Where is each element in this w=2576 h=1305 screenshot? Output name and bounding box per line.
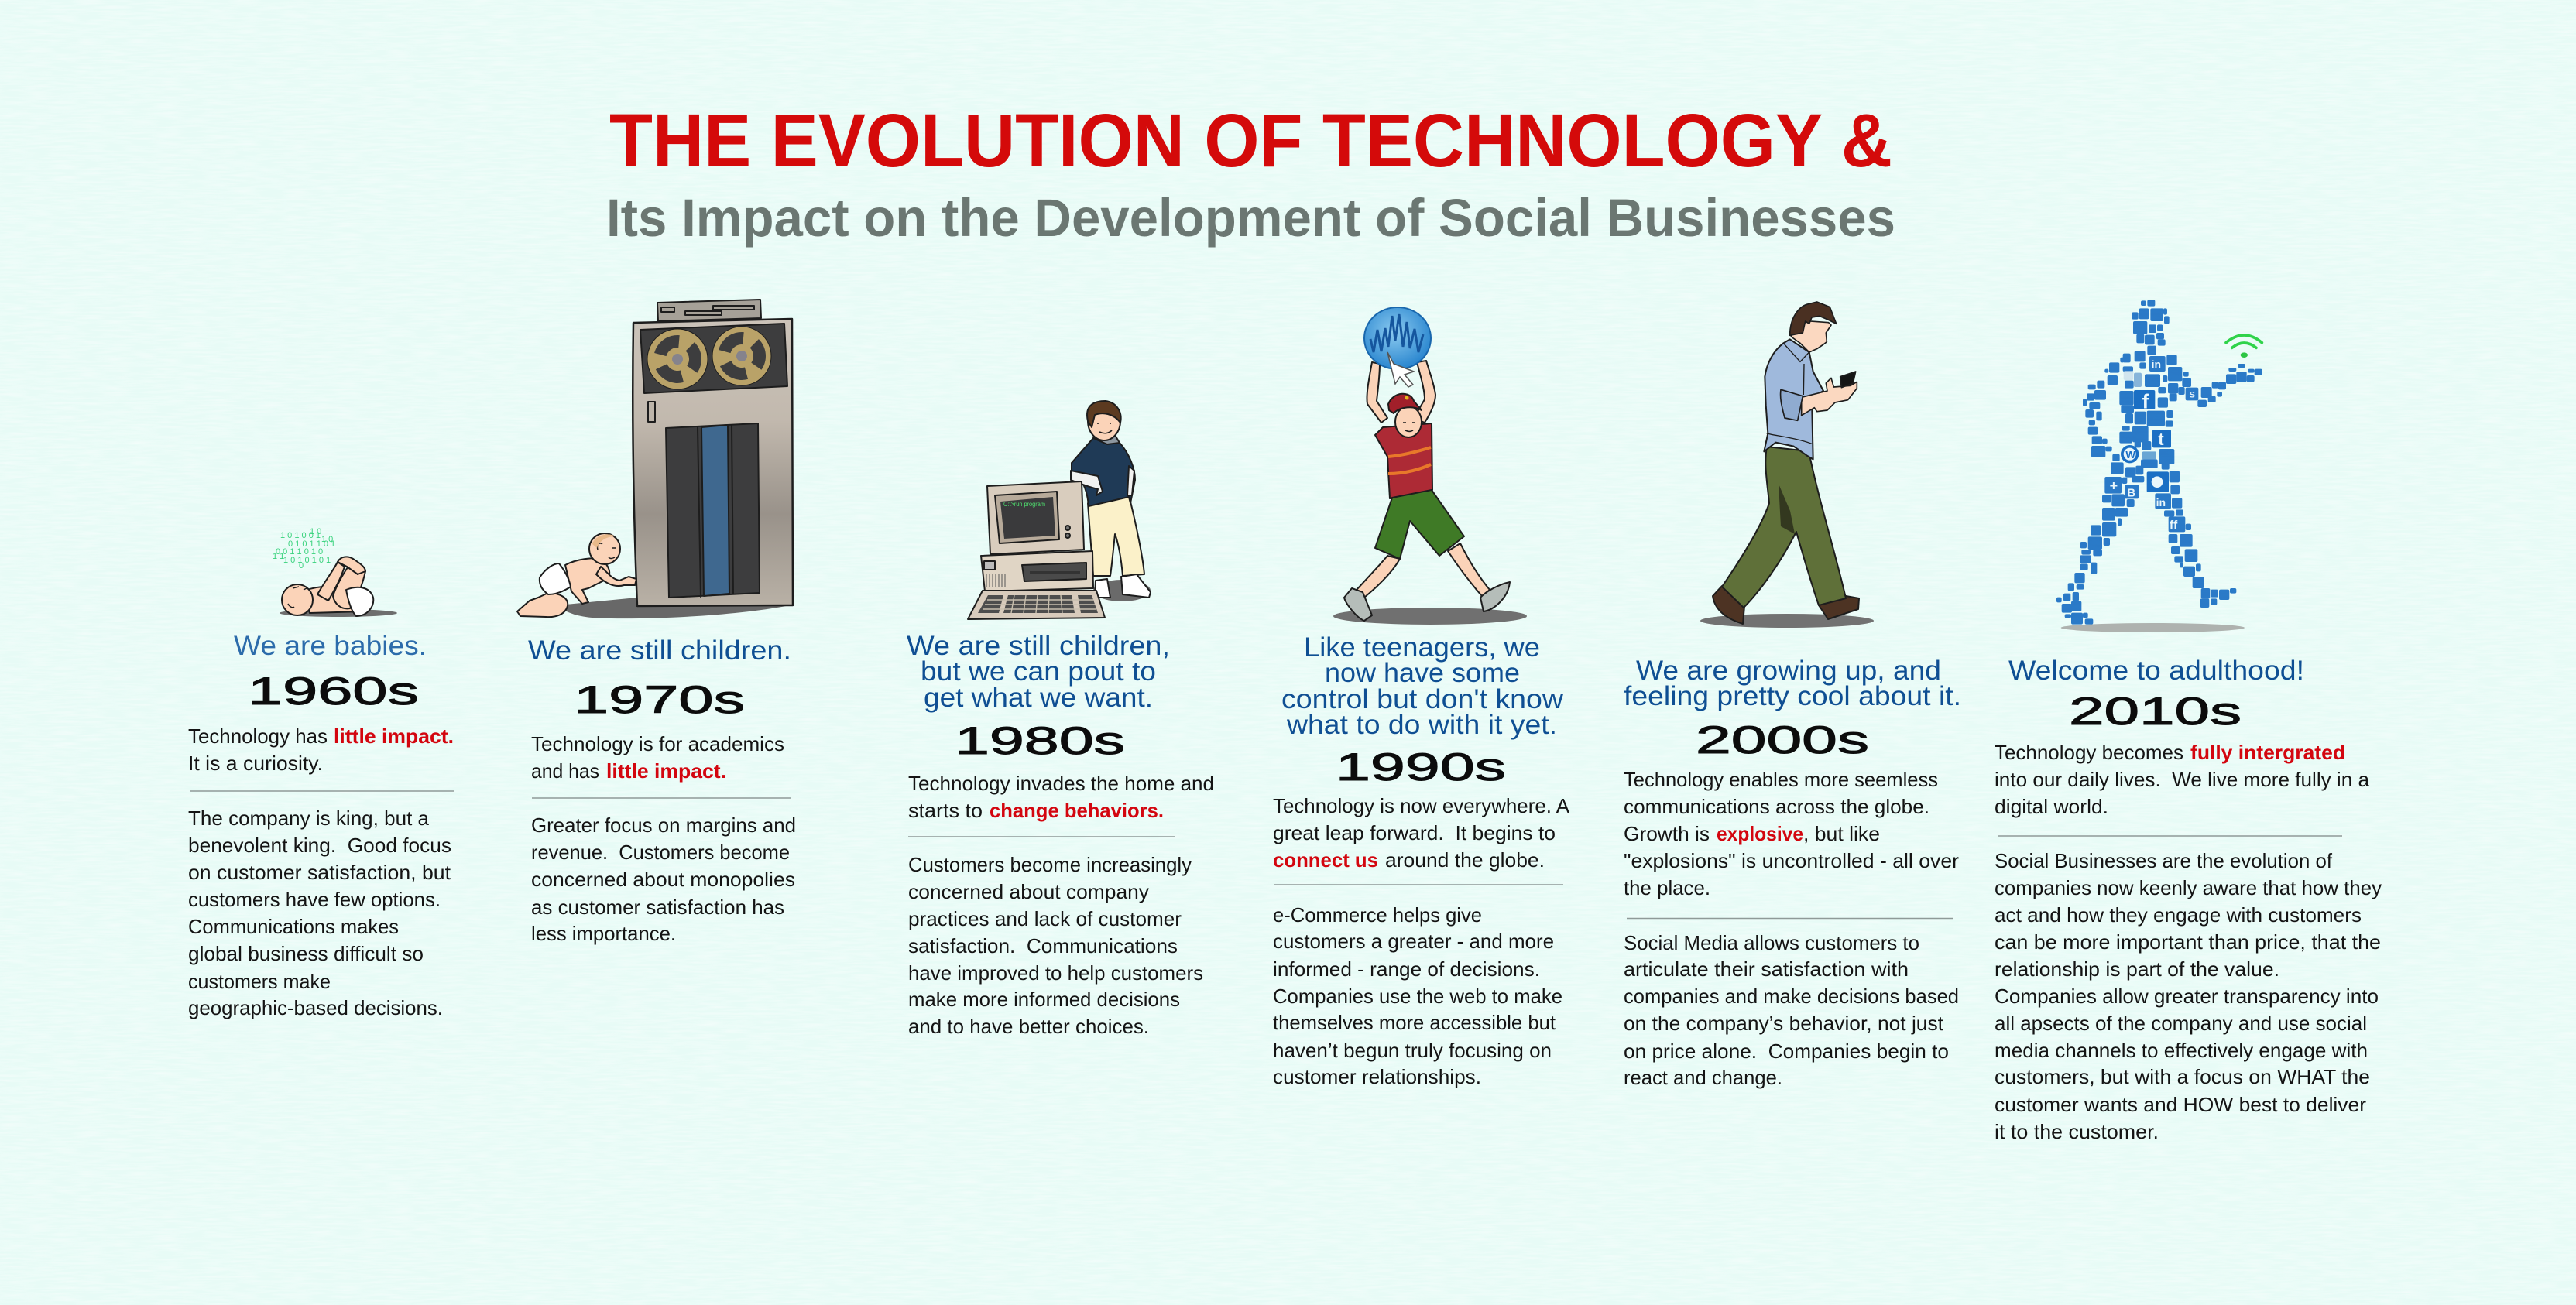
business text: and to have better choices.	[908, 1015, 1149, 1038]
business text	[1273, 903, 1562, 1088]
business text: concerned about company	[908, 880, 1149, 903]
icon: baby with binary digits: 1 0 1 0 1 0 1	[283, 556, 331, 565]
slogan	[1281, 632, 1564, 740]
impact text: "explosions" is uncontrolled - all over	[1624, 849, 1959, 872]
impact text: around the globe.	[1385, 848, 1545, 872]
impact text	[531, 732, 784, 783]
impact text: Technology becomes	[1995, 741, 2183, 764]
panel: 1990s	[1273, 307, 1570, 1088]
business text: satisfaction. Communications	[908, 934, 1178, 957]
business text: make more informed decisions	[908, 988, 1180, 1011]
icon: baby with binary digits: 1 0	[310, 527, 321, 536]
business text: it to the customer.	[1995, 1120, 2159, 1143]
slogan: but we can pout to	[921, 656, 1156, 687]
impact text: connect us	[1273, 848, 1378, 872]
business text	[531, 813, 796, 945]
impact text: little impact.	[334, 724, 454, 748]
business text: act and how they engage with customers	[1995, 903, 2362, 927]
business text: Companies allow greater transparency into	[1995, 985, 2379, 1008]
impact text	[1995, 741, 2370, 818]
business text: revenue. Customers become	[531, 841, 790, 864]
icon: baby with binary digits: 0 0 1 1 0 1 0	[276, 547, 323, 557]
slogan	[1624, 656, 1961, 711]
slogan: Like teenagers, we	[1304, 632, 1540, 663]
panel: 1960s	[188, 527, 454, 1019]
impact text	[1273, 794, 1570, 872]
business text: relationship is part of the value.	[1995, 957, 2279, 981]
business text: geographic-based decisions.	[188, 996, 443, 1019]
impact text: communications across the globe.	[1624, 795, 1929, 818]
impact text: Technology is now everywhere. A	[1273, 794, 1570, 817]
icon: baby with binary digits: 0 1 0 1 1 0 1	[288, 539, 335, 549]
impact text: Technology is for academics	[531, 732, 784, 755]
business text: customers make	[188, 970, 331, 993]
business text: media channels to effectively engage with	[1995, 1039, 2368, 1062]
business text: on the company’s behavior, not just	[1624, 1012, 1944, 1035]
business text	[1995, 849, 2382, 1143]
icon: figure made of social media icons: W	[2125, 449, 2135, 461]
business text: can be more important than price, that the	[1995, 930, 2381, 954]
business text: customers have few options.	[188, 888, 441, 911]
business text: articulate their satisfaction with	[1624, 957, 1909, 981]
business text	[1624, 931, 1959, 1089]
slogan: Welcome to adulthood!	[2008, 656, 2304, 686]
icon: child with personal computer	[968, 401, 1151, 619]
panel: 2010s	[1995, 300, 2382, 1143]
slogan	[907, 631, 1170, 713]
impact text: It is a curiosity.	[188, 752, 323, 775]
slogan: get what we want.	[924, 683, 1153, 713]
panel: 2000s	[1624, 302, 1961, 1089]
impact text: change behaviors.	[990, 799, 1164, 822]
impact text: and has	[531, 759, 599, 783]
impact text	[1624, 768, 1959, 899]
impact text: Growth is	[1624, 822, 1710, 845]
impact text	[188, 724, 454, 775]
icon: figure made of social media icons: ff	[2170, 519, 2178, 532]
icon: man walking with smartphone	[1700, 302, 1874, 628]
year: 1980s	[955, 719, 1125, 762]
year: 1990s	[1336, 745, 1506, 789]
slogan: now have some	[1325, 658, 1520, 688]
icon: baby with binary digits: 1 0	[321, 535, 333, 544]
business text: have improved to help customers	[908, 961, 1203, 985]
business text: companies and make decisions based	[1624, 985, 1959, 1008]
business text: global business difficult so	[188, 942, 424, 965]
slogan: feeling pretty cool about it.	[1624, 681, 1961, 711]
year: 1960s	[248, 670, 419, 713]
business text: Customers become increasingly	[908, 853, 1192, 876]
icon: teenager holding www globe	[1333, 307, 1527, 625]
slogan: We are babies.	[234, 631, 427, 661]
business text: Companies use the web to make	[1273, 985, 1562, 1008]
impact text: starts to	[908, 799, 983, 822]
impact text: fully intergrated	[2190, 741, 2345, 764]
business text: on price alone. Companies begin to	[1624, 1040, 1949, 1063]
business text: Communications makes	[188, 915, 399, 938]
icon: baby with binary digits	[273, 527, 397, 617]
business text: customer relationships.	[1273, 1065, 1481, 1088]
business text: haven’t begun truly focusing on	[1273, 1039, 1552, 1062]
business text: themselves more accessible but	[1273, 1011, 1556, 1034]
business text: companies now keenly aware that how they	[1995, 876, 2382, 899]
business text: informed - range of decisions.	[1273, 957, 1540, 981]
business text: The company is king, but a	[188, 807, 430, 830]
business text	[188, 807, 451, 1019]
impact text: into our daily lives. We live more fully in a	[1995, 768, 2370, 791]
impact text: Technology enables more seemless	[1624, 768, 1938, 791]
icon: figure made of social media icons: in	[2156, 496, 2166, 509]
business text: customers a greater - and more	[1273, 930, 1554, 953]
business text: less importance.	[531, 922, 676, 945]
impact text: great leap forward. It begins to	[1273, 821, 1556, 844]
business text: react and change.	[1624, 1066, 1782, 1089]
business text: Social Media allows customers to	[1624, 931, 1919, 954]
icon: child with personal computer: C:\>run program	[1003, 501, 1045, 508]
year: 2010s	[2069, 690, 2242, 733]
impact text: explosive	[1717, 822, 1803, 845]
business text: benevolent king. Good focus	[188, 834, 451, 857]
slogan: We are still children.	[528, 635, 791, 666]
business text: practices and lack of customer	[908, 907, 1182, 930]
icon: baby with binary digits: 0	[299, 561, 304, 570]
business text: Social Businesses are the evolution of	[1995, 849, 2333, 872]
business text: concerned about monopolies	[531, 868, 795, 891]
business text: as customer satisfaction has	[531, 896, 784, 919]
icon: baby with binary digits: 1 1	[273, 552, 284, 561]
title: THE EVOLUTION OF TECHNOLOGY &	[609, 98, 1892, 183]
panel: 1980s	[907, 401, 1214, 1038]
icon: figure made of social media icons: f	[2142, 389, 2149, 413]
impact text	[908, 772, 1214, 822]
icon: baby pushing mainframe	[517, 300, 793, 618]
slogan: control but don't know	[1281, 684, 1564, 714]
business text: Greater focus on margins and	[531, 813, 796, 837]
business text: customer wants and HOW best to deliver	[1995, 1093, 2366, 1116]
impact text: the place.	[1624, 876, 1710, 899]
panel: 1970s	[517, 300, 796, 945]
year: 2000s	[1696, 718, 1869, 762]
icon: baby with binary digits: 1 0 1 0 0 1	[280, 531, 321, 540]
business text: e-Commerce helps give	[1273, 903, 1482, 927]
business text: customers, but with a focus on WHAT the	[1995, 1065, 2370, 1088]
year: 1970s	[574, 678, 745, 721]
slogan: We are still children,	[907, 631, 1170, 661]
slogan: We are growing up, and	[1636, 656, 1941, 686]
icon: figure made of social media icons: +	[2110, 478, 2118, 493]
impact text: Technology has	[188, 724, 328, 748]
impact text: , but like	[1803, 822, 1880, 845]
business text	[908, 853, 1203, 1038]
icon: figure made of social media icons: S	[2189, 390, 2195, 399]
impact text: digital world.	[1995, 795, 2108, 818]
subtitle: Its Impact on the Development of Social Businesses	[606, 188, 1895, 248]
impact text: Technology invades the home and	[908, 772, 1214, 795]
icon: figure made of social media icons	[2056, 300, 2262, 632]
business text: on customer satisfaction, but	[188, 861, 451, 884]
impact text: little impact.	[606, 759, 726, 783]
icon: figure made of social media icons: B	[2127, 487, 2135, 499]
slogan: what to do with it yet.	[1286, 710, 1557, 740]
icon: figure made of social media icons: in	[2152, 358, 2161, 370]
icon: figure made of social media icons: t	[2158, 430, 2164, 449]
business text: all apsects of the company and use social	[1995, 1012, 2367, 1035]
